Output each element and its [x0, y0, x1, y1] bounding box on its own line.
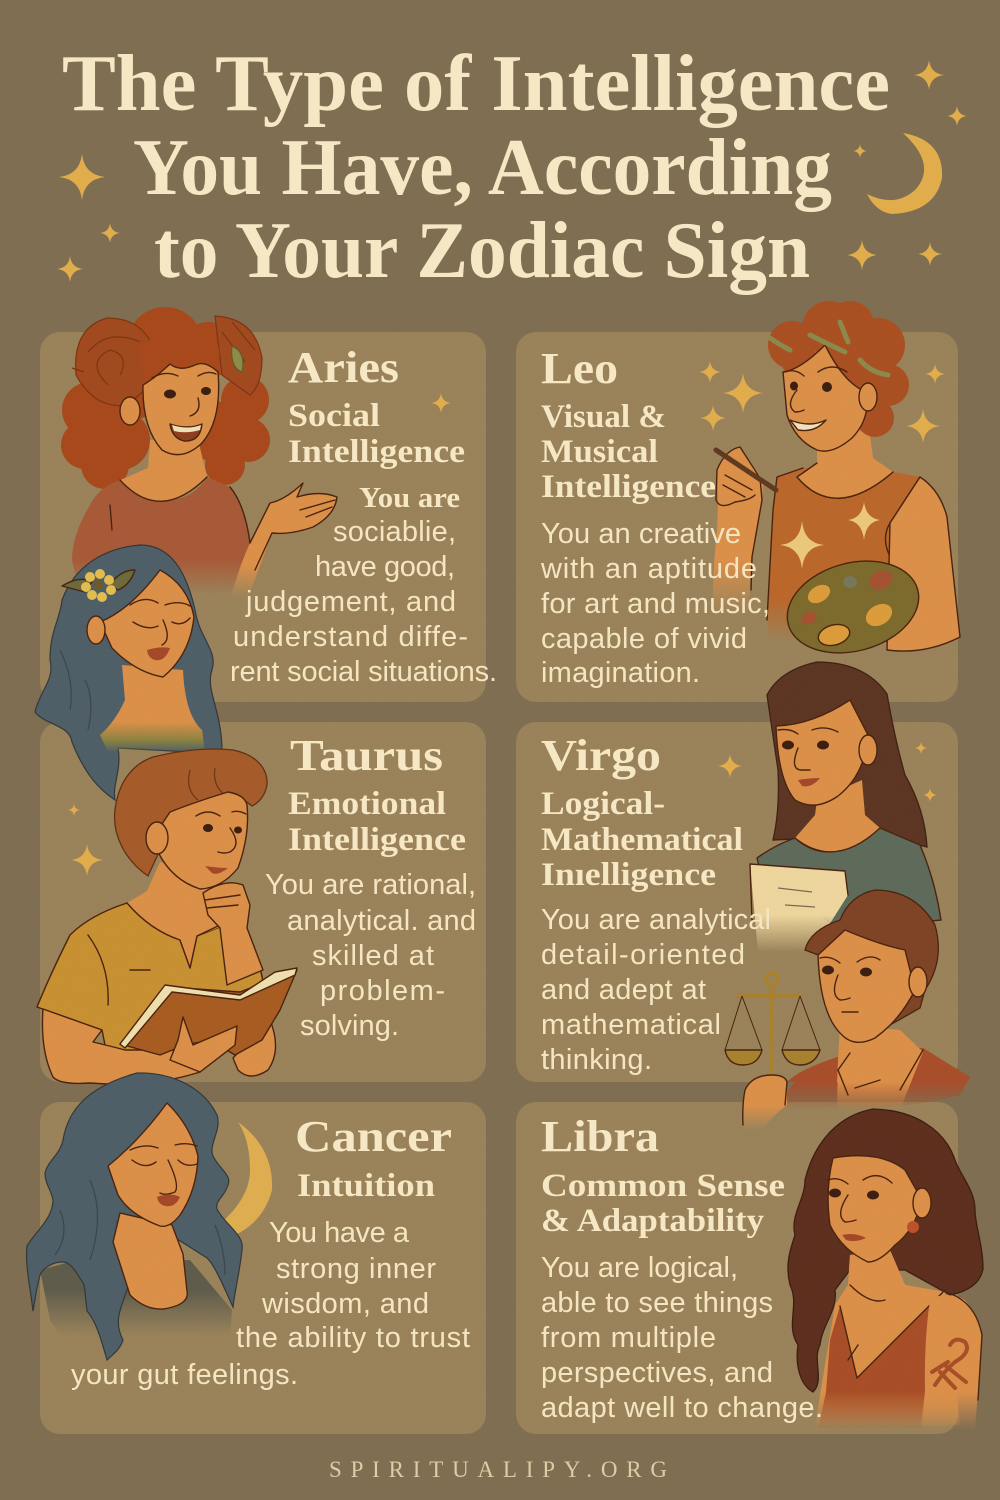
intelligence type: libra	[541, 1168, 785, 1239]
icon: flower	[62, 569, 135, 602]
icon: taurus stars	[68, 804, 103, 876]
intelligence type: leo: Intelligence	[541, 469, 716, 505]
hair	[35, 545, 222, 800]
icon: aries star	[431, 393, 451, 413]
face	[818, 930, 915, 1042]
description: virgo: You are analytical	[541, 904, 771, 936]
description: cancer: You have a	[269, 1217, 410, 1249]
icon: crescent moon	[867, 133, 942, 214]
neck	[795, 780, 880, 852]
holding hand	[170, 1017, 237, 1072]
description: libra: able to see things	[541, 1287, 773, 1319]
description: aries: rent social situations.	[230, 656, 497, 688]
intelligence type: virgo: Logical-	[541, 786, 665, 822]
paper	[750, 864, 848, 952]
text: libra	[541, 1112, 823, 1424]
fringe	[140, 335, 219, 385]
illustration: libra woman	[788, 1109, 983, 1430]
panel: virgo card	[516, 722, 958, 1082]
text: leo	[540, 344, 770, 689]
intelligence type: taurus: Emotional	[288, 786, 446, 822]
illustration: cancer woman	[27, 1073, 242, 1360]
right arm	[887, 477, 960, 651]
tunic	[767, 468, 925, 642]
dress	[40, 1260, 232, 1336]
text: aries	[230, 343, 497, 688]
sign name: cancer: Cancer	[295, 1112, 452, 1161]
intelligence type: aries: Social	[288, 398, 380, 434]
neck and chest	[113, 1213, 187, 1309]
sign name: leo: Leo	[541, 344, 618, 393]
description: libra: adapt well to change.	[541, 1392, 823, 1424]
sign name: libra: Libra	[541, 1112, 659, 1161]
description: taurus: skilled at	[312, 940, 434, 972]
icon: virgo stars	[718, 742, 937, 802]
hair	[115, 749, 267, 876]
intelligence type: leo: Musical	[541, 434, 658, 470]
description: libra: perspectives, and	[541, 1357, 773, 1389]
icon: header stars	[57, 60, 967, 282]
illustration: virgo lower woman with scales	[725, 890, 970, 1130]
intelligence type: leo	[541, 399, 716, 505]
text: cancer	[71, 1112, 470, 1391]
description: taurus	[265, 869, 476, 1042]
description: taurus: problem-	[320, 975, 445, 1007]
text: virgo	[541, 731, 771, 1076]
intelligence type: virgo	[541, 786, 743, 893]
face	[783, 345, 867, 451]
shirt	[37, 903, 263, 1060]
hair	[788, 1109, 983, 1392]
lower arm	[42, 1009, 237, 1084]
arm	[925, 1295, 982, 1392]
palette	[777, 547, 929, 667]
face	[108, 1103, 198, 1226]
description: aries: judgement, and	[245, 586, 456, 618]
face	[776, 700, 868, 805]
elbow	[233, 1020, 276, 1076]
intelligence type: libra: Common Sense	[541, 1168, 785, 1204]
description: aries: understand diffe-	[233, 621, 468, 653]
icon: leo stars	[699, 361, 945, 443]
chest	[815, 1250, 960, 1425]
description: leo: imagination.	[541, 657, 700, 689]
panel: taurus card	[40, 722, 486, 1082]
description: taurus: analytical. and	[287, 905, 476, 937]
description: aries	[230, 482, 497, 688]
top	[826, 1290, 945, 1392]
illustration: leo man	[713, 301, 960, 667]
hair	[61, 307, 270, 489]
panel: aries card	[40, 332, 486, 702]
neck	[100, 665, 205, 752]
description: leo	[540, 518, 770, 689]
description: cancer: strong inner	[276, 1253, 436, 1285]
description: virgo: thinking.	[541, 1044, 652, 1076]
description: leo: with an aptitude	[540, 553, 757, 585]
book	[120, 968, 297, 1055]
description: libra: from multiple	[541, 1322, 716, 1354]
shirt	[72, 477, 250, 595]
intelligence type: taurus: Intelligence	[288, 822, 466, 858]
hand	[743, 1075, 787, 1130]
shirt	[757, 828, 941, 930]
ram horns	[72, 316, 262, 406]
icon: cancer moon	[215, 1122, 272, 1240]
intelligence type: virgo: Mathematical	[541, 822, 743, 858]
intelligence type: cancer: Intuition	[297, 1168, 435, 1204]
illustration: aries woman	[61, 307, 337, 598]
description: taurus: solving.	[300, 1010, 399, 1042]
intelligence type: virgo: Inıelligence	[541, 857, 716, 893]
neck	[120, 435, 207, 501]
raised hand and brush	[713, 447, 776, 615]
description: cancer	[71, 1217, 470, 1391]
top	[787, 1048, 970, 1110]
text: taurus	[265, 731, 476, 1042]
description: virgo: and adept at	[541, 974, 706, 1006]
hair	[805, 890, 938, 1025]
illustration: blue-haired woman with flower	[35, 545, 222, 800]
scales	[725, 973, 820, 1080]
panel backgrounds	[40, 332, 958, 1434]
title: The Type of Intelligence	[62, 40, 890, 128]
description: aries: You are	[359, 482, 460, 514]
description: aries: sociablie,	[333, 516, 456, 548]
face	[828, 1156, 922, 1262]
description: leo: capable of vivid	[541, 623, 747, 655]
face	[143, 364, 219, 455]
description: cancer: the ability to trust	[236, 1322, 470, 1354]
sign name: taurus: Taurus	[290, 731, 443, 780]
hair	[767, 662, 927, 847]
description: virgo: detail-oriented	[541, 939, 745, 971]
illustration: virgo upper woman	[750, 662, 941, 952]
shirt stars	[780, 502, 880, 569]
chest	[837, 1025, 923, 1110]
neck	[127, 862, 225, 968]
face	[100, 570, 194, 677]
description: cancer: wisdom, and	[261, 1288, 429, 1320]
title: to Your Zodiac Sign	[154, 207, 810, 295]
description: aries: have good,	[315, 551, 455, 583]
description: leo: for art and music,	[541, 588, 770, 620]
hair	[768, 301, 909, 437]
neck	[797, 420, 893, 497]
hair	[27, 1073, 242, 1360]
intelligence type: aries	[288, 398, 465, 470]
description: virgo: mathematical	[541, 1009, 721, 1041]
illustration: taurus man with book	[37, 749, 297, 1084]
face	[158, 792, 248, 889]
laurel wreath	[770, 322, 888, 375]
panel: libra card	[516, 1102, 958, 1434]
arm and hand	[230, 483, 337, 598]
footer: SPIRITUALIPY.ORG	[329, 1457, 667, 1482]
panel: leo card	[516, 332, 958, 702]
intelligence type: aries: Intelligence	[288, 434, 465, 470]
description: libra	[541, 1252, 823, 1424]
description: virgo	[541, 904, 771, 1076]
intelligence type: leo: Visual &	[541, 399, 666, 435]
sign name: aries: Aries	[288, 343, 399, 392]
sign name: virgo: Virgo	[541, 731, 661, 780]
description: libra: You are logical,	[541, 1252, 738, 1284]
panel: cancer card	[40, 1102, 486, 1434]
chin hand and forearm	[203, 883, 263, 985]
description: leo: You an creative	[541, 518, 741, 550]
intelligence type: taurus	[288, 786, 466, 858]
title	[62, 40, 890, 295]
title: You Have, According	[133, 124, 832, 212]
description: taurus: You are rational,	[265, 869, 476, 901]
description: cancer: your gut feelings.	[71, 1359, 298, 1391]
scorpion tattoo	[932, 1340, 967, 1388]
intelligence type: libra: & Adaptability	[541, 1203, 765, 1239]
